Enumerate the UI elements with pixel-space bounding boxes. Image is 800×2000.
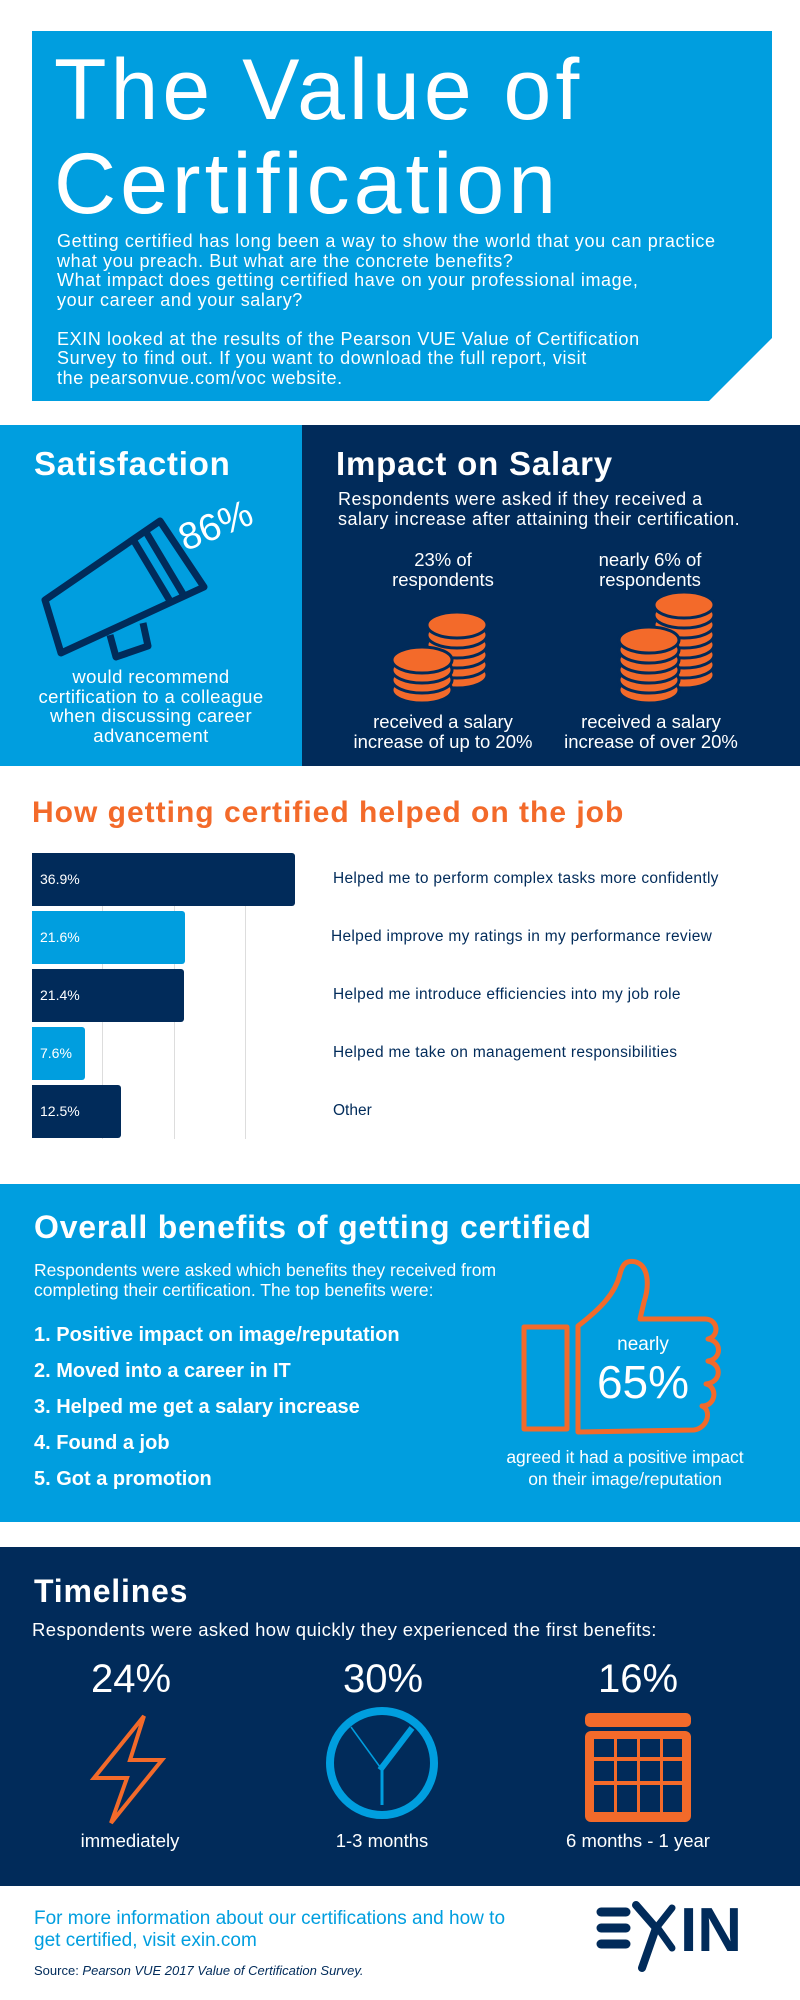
bar chart: 12.5% [40, 1103, 80, 1119]
caption [38, 666, 264, 746]
bar chart: Helped improve my ratings in my performance review [331, 928, 712, 945]
description [338, 489, 740, 529]
stat: 23%: respondents [392, 568, 494, 590]
stat: 30%: 30% [343, 1657, 423, 1701]
panel: satisfaction [0, 425, 302, 766]
bar chart [32, 853, 719, 1139]
bar chart: Other [333, 1102, 372, 1119]
description: Respondents were asked if they received a [338, 489, 703, 509]
bar chart: 21.4% [40, 987, 80, 1003]
panel: impact on salary [302, 425, 800, 766]
caption: up to 20%: received a salary [373, 711, 513, 732]
icons: lightning, clock, calendar [90, 1707, 691, 1824]
bar chart: 21.6% [40, 929, 80, 945]
caption: when discussing career [50, 705, 252, 726]
caption [506, 1447, 744, 1489]
caption: over 20%: increase of over 20% [564, 730, 738, 752]
panel: overall benefits: 65% [597, 1356, 689, 1408]
footer text [34, 1908, 505, 1951]
intro text [57, 231, 716, 388]
caption: advancement [93, 724, 209, 746]
description: Respondents were asked how quickly they experienced the first benefits: [32, 1619, 657, 1640]
intro text: What impact does getting certified have on your professional image, [57, 270, 638, 290]
stat: 23%: 23% of [414, 549, 472, 570]
panel: timelines [0, 1547, 800, 1886]
panel: overall benefits [0, 1184, 800, 1522]
bar chart: Helped me to perform complex tasks more confidently [333, 870, 719, 887]
intro text: EXIN looked at the results of the Pearson VUE Value of Certification [57, 328, 640, 348]
intro text: your career and your salary? [57, 290, 303, 310]
heading: satisfaction: Satisfaction [34, 445, 231, 482]
caption: would recommend [72, 666, 230, 687]
benefits list: 5. Got a promotion [34, 1468, 212, 1490]
bar chart: 7.6% [40, 1045, 72, 1061]
description [34, 1260, 496, 1300]
title: Certification [54, 136, 560, 232]
label: immediately: immediately [81, 1830, 179, 1851]
stat: 16%: 16% [598, 1657, 678, 1701]
label: 1-3 months: 1-3 months [336, 1830, 428, 1851]
source note: Source: Pearson VUE 2017 Value of Certification Survey. [34, 1963, 364, 1978]
stat: nearly 6% [599, 549, 702, 590]
intro text: what you preach. But what are the concrete benefits? [57, 250, 513, 270]
icon: coins [394, 594, 712, 702]
bar chart: Helped me take on management responsibilities [333, 1044, 677, 1061]
stat: nearly 6%: respondents [599, 568, 701, 590]
caption: over 20% [564, 711, 738, 752]
heading: impact on salary: Impact on Salary [336, 445, 613, 482]
bar chart: 36.9% [40, 871, 80, 887]
description: salary increase after attaining their certification. [338, 508, 740, 528]
benefits list: 3. Helped me get a salary increase [34, 1396, 360, 1418]
heading: how getting certified helped: How getting certified helped on the job [32, 796, 624, 829]
stat: 24%: 24% [91, 1657, 171, 1701]
header panel [32, 31, 772, 401]
title [54, 42, 583, 232]
stat: 86%: 86% [173, 492, 259, 560]
icon: thumbs up [522, 1258, 721, 1434]
bar chart: Helped me introduce efficiencies into my job role [333, 986, 681, 1003]
intro text: Getting certified has long been a way to show the world that you can practice [57, 231, 716, 251]
caption: up to 20% [354, 711, 532, 752]
stat: nearly 65%: nearly [617, 1334, 669, 1355]
description: Respondents were asked which benefits they received from [34, 1260, 496, 1280]
benefits list: 4. Found a job [34, 1432, 170, 1454]
caption: certification to a colleague [38, 686, 264, 706]
stat: 23% [392, 549, 494, 590]
intro text: the pearsonvue.com/voc website. [57, 368, 343, 388]
benefits list: 2. Moved into a career in IT [34, 1360, 291, 1382]
intro text: Survey to find out. If you want to download the full report, visit [57, 348, 587, 368]
footer text: get certified, visit exin.com [34, 1930, 257, 1951]
caption: on their image/reputation [528, 1469, 722, 1489]
benefits list: 1. Positive impact on image/reputation [34, 1324, 400, 1346]
heading: timelines: Timelines [34, 1573, 188, 1609]
stat: nearly 6%: nearly 6% of [599, 549, 701, 570]
benefits list [34, 1324, 400, 1490]
description: completing their certification. The top benefits were: [34, 1280, 433, 1300]
title: The Value of [54, 42, 583, 138]
icon: megaphone [42, 518, 208, 660]
caption: up to 20%: increase of up to 20% [354, 730, 532, 752]
caption: agreed it had a positive impact [506, 1447, 744, 1467]
logo: EXIN [596, 1900, 742, 1972]
heading: overall benefits: Overall benefits of getting certified [34, 1209, 592, 1245]
footer text: For more information about our certifications and how to [34, 1908, 505, 1929]
caption: over 20%: received a salary [581, 711, 721, 732]
label: 6 months - 1 year: 6 months - 1 year [566, 1830, 710, 1851]
